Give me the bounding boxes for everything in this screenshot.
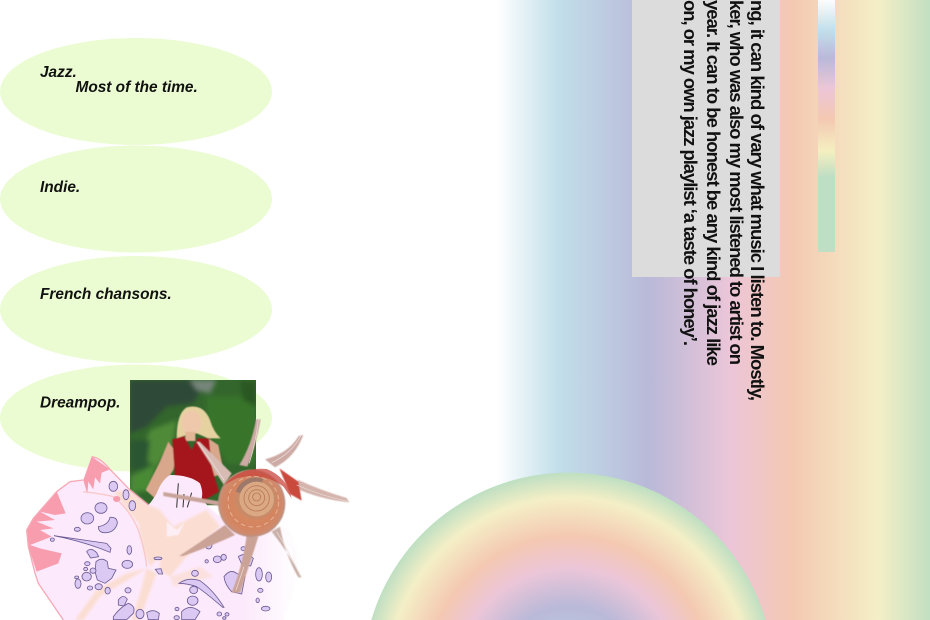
grey text panel — [632, 0, 780, 277]
bubble: jazz — [0, 38, 272, 145]
rotated body text: ng, it can kind of vary what music I listen to. Mostly, — [747, 0, 768, 401]
collage: photo, flower and shell — [27, 380, 349, 620]
soft glow right side — [213, 530, 293, 617]
flower — [27, 457, 294, 620]
bubble: indie: Indie. — [40, 179, 80, 196]
sea shell — [163, 419, 349, 593]
rainbow gradient background — [497, 0, 930, 620]
photo: woman with cello in forest — [130, 380, 256, 505]
arms — [146, 442, 177, 498]
rainbow arc — [371, 473, 766, 620]
face and neck — [182, 411, 201, 432]
hair — [177, 407, 221, 438]
bubble: dreampop — [0, 364, 272, 472]
bubble: dreampop: Dreampop. — [40, 394, 120, 412]
pink petal seam — [83, 492, 147, 567]
spiral whorl — [235, 477, 277, 519]
dark flower marks — [177, 483, 192, 508]
rotated body text: on, or my own jazz playlist ‘a taste of honey’. — [680, 0, 701, 346]
rotated body text: ker, who was also my most listened to artist on — [726, 0, 747, 365]
pale star in flower centre — [167, 522, 185, 537]
pink petal edges — [27, 457, 110, 572]
red dress — [172, 436, 219, 505]
rotated body text: year. It can to be honest be any kind of jazz like — [703, 0, 724, 366]
small pink spot — [113, 496, 120, 502]
shell body — [218, 470, 285, 537]
purple blobs — [50, 481, 272, 620]
spines — [163, 419, 349, 593]
petals — [27, 457, 294, 620]
bubble: indie — [0, 146, 272, 252]
bubble: french chansons: French chansons. — [40, 286, 172, 303]
peach centre veins — [75, 490, 220, 620]
rotated body text — [680, 0, 768, 401]
bubble: jazz: Most of the time. — [76, 79, 198, 96]
spine highlights — [198, 420, 348, 590]
pink outline — [27, 457, 148, 620]
bubble: jazz: Jazz. — [40, 64, 77, 81]
bubble: french chansons — [0, 256, 272, 363]
cream speckle ring — [228, 476, 279, 527]
vertical rainbow strip — [818, 0, 835, 252]
